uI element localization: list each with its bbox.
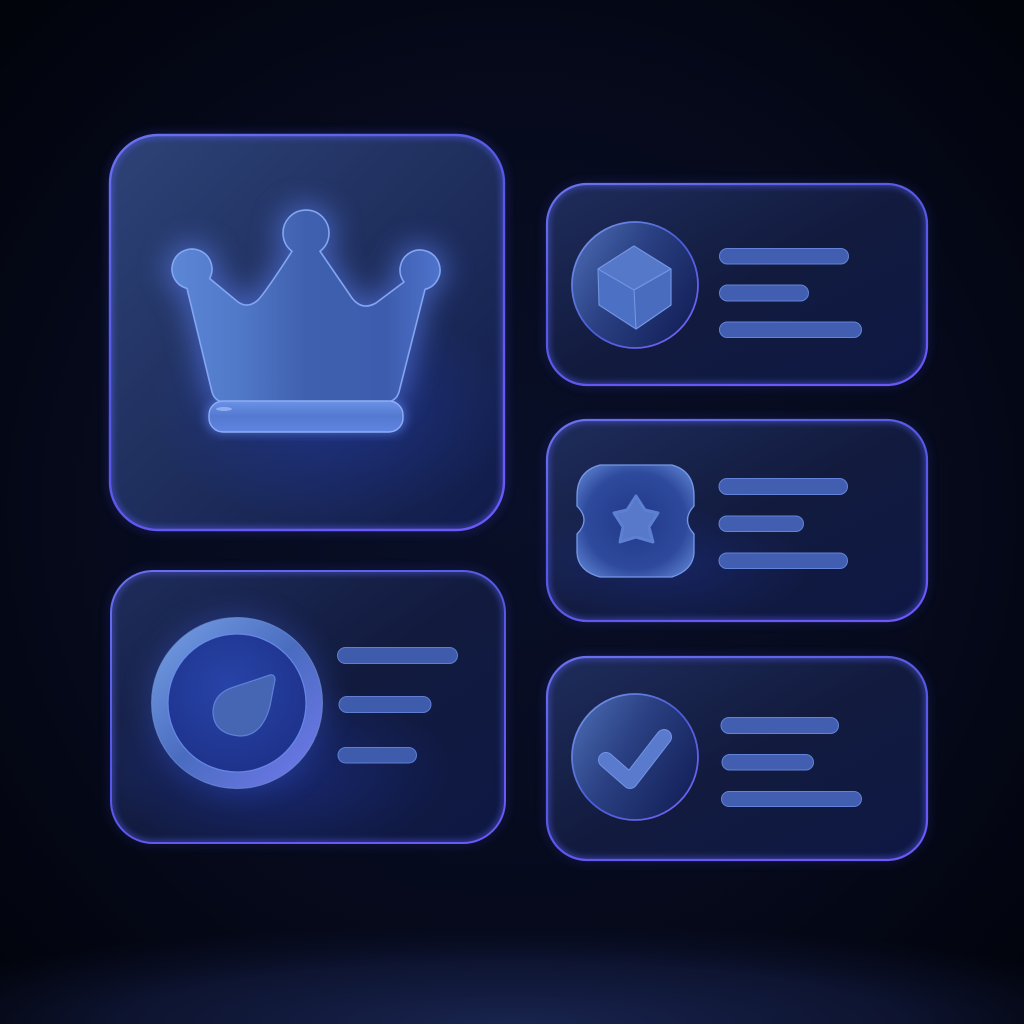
panel: check card bbox=[547, 657, 927, 860]
panel: crown card bbox=[110, 135, 510, 530]
text lines bbox=[719, 478, 848, 568]
icon: crown bbox=[172, 210, 440, 434]
panel: gauge card bbox=[90, 571, 505, 860]
panel: cube card bbox=[547, 184, 927, 385]
text lines bbox=[338, 648, 458, 763]
icon: star ticket bbox=[577, 465, 694, 577]
icon: check bbox=[572, 694, 698, 820]
icon: gauge bbox=[149, 615, 325, 791]
panel: ticket card bbox=[510, 420, 927, 625]
icon: cube bbox=[572, 222, 698, 348]
text lines bbox=[720, 248, 862, 338]
text lines bbox=[721, 718, 862, 806]
